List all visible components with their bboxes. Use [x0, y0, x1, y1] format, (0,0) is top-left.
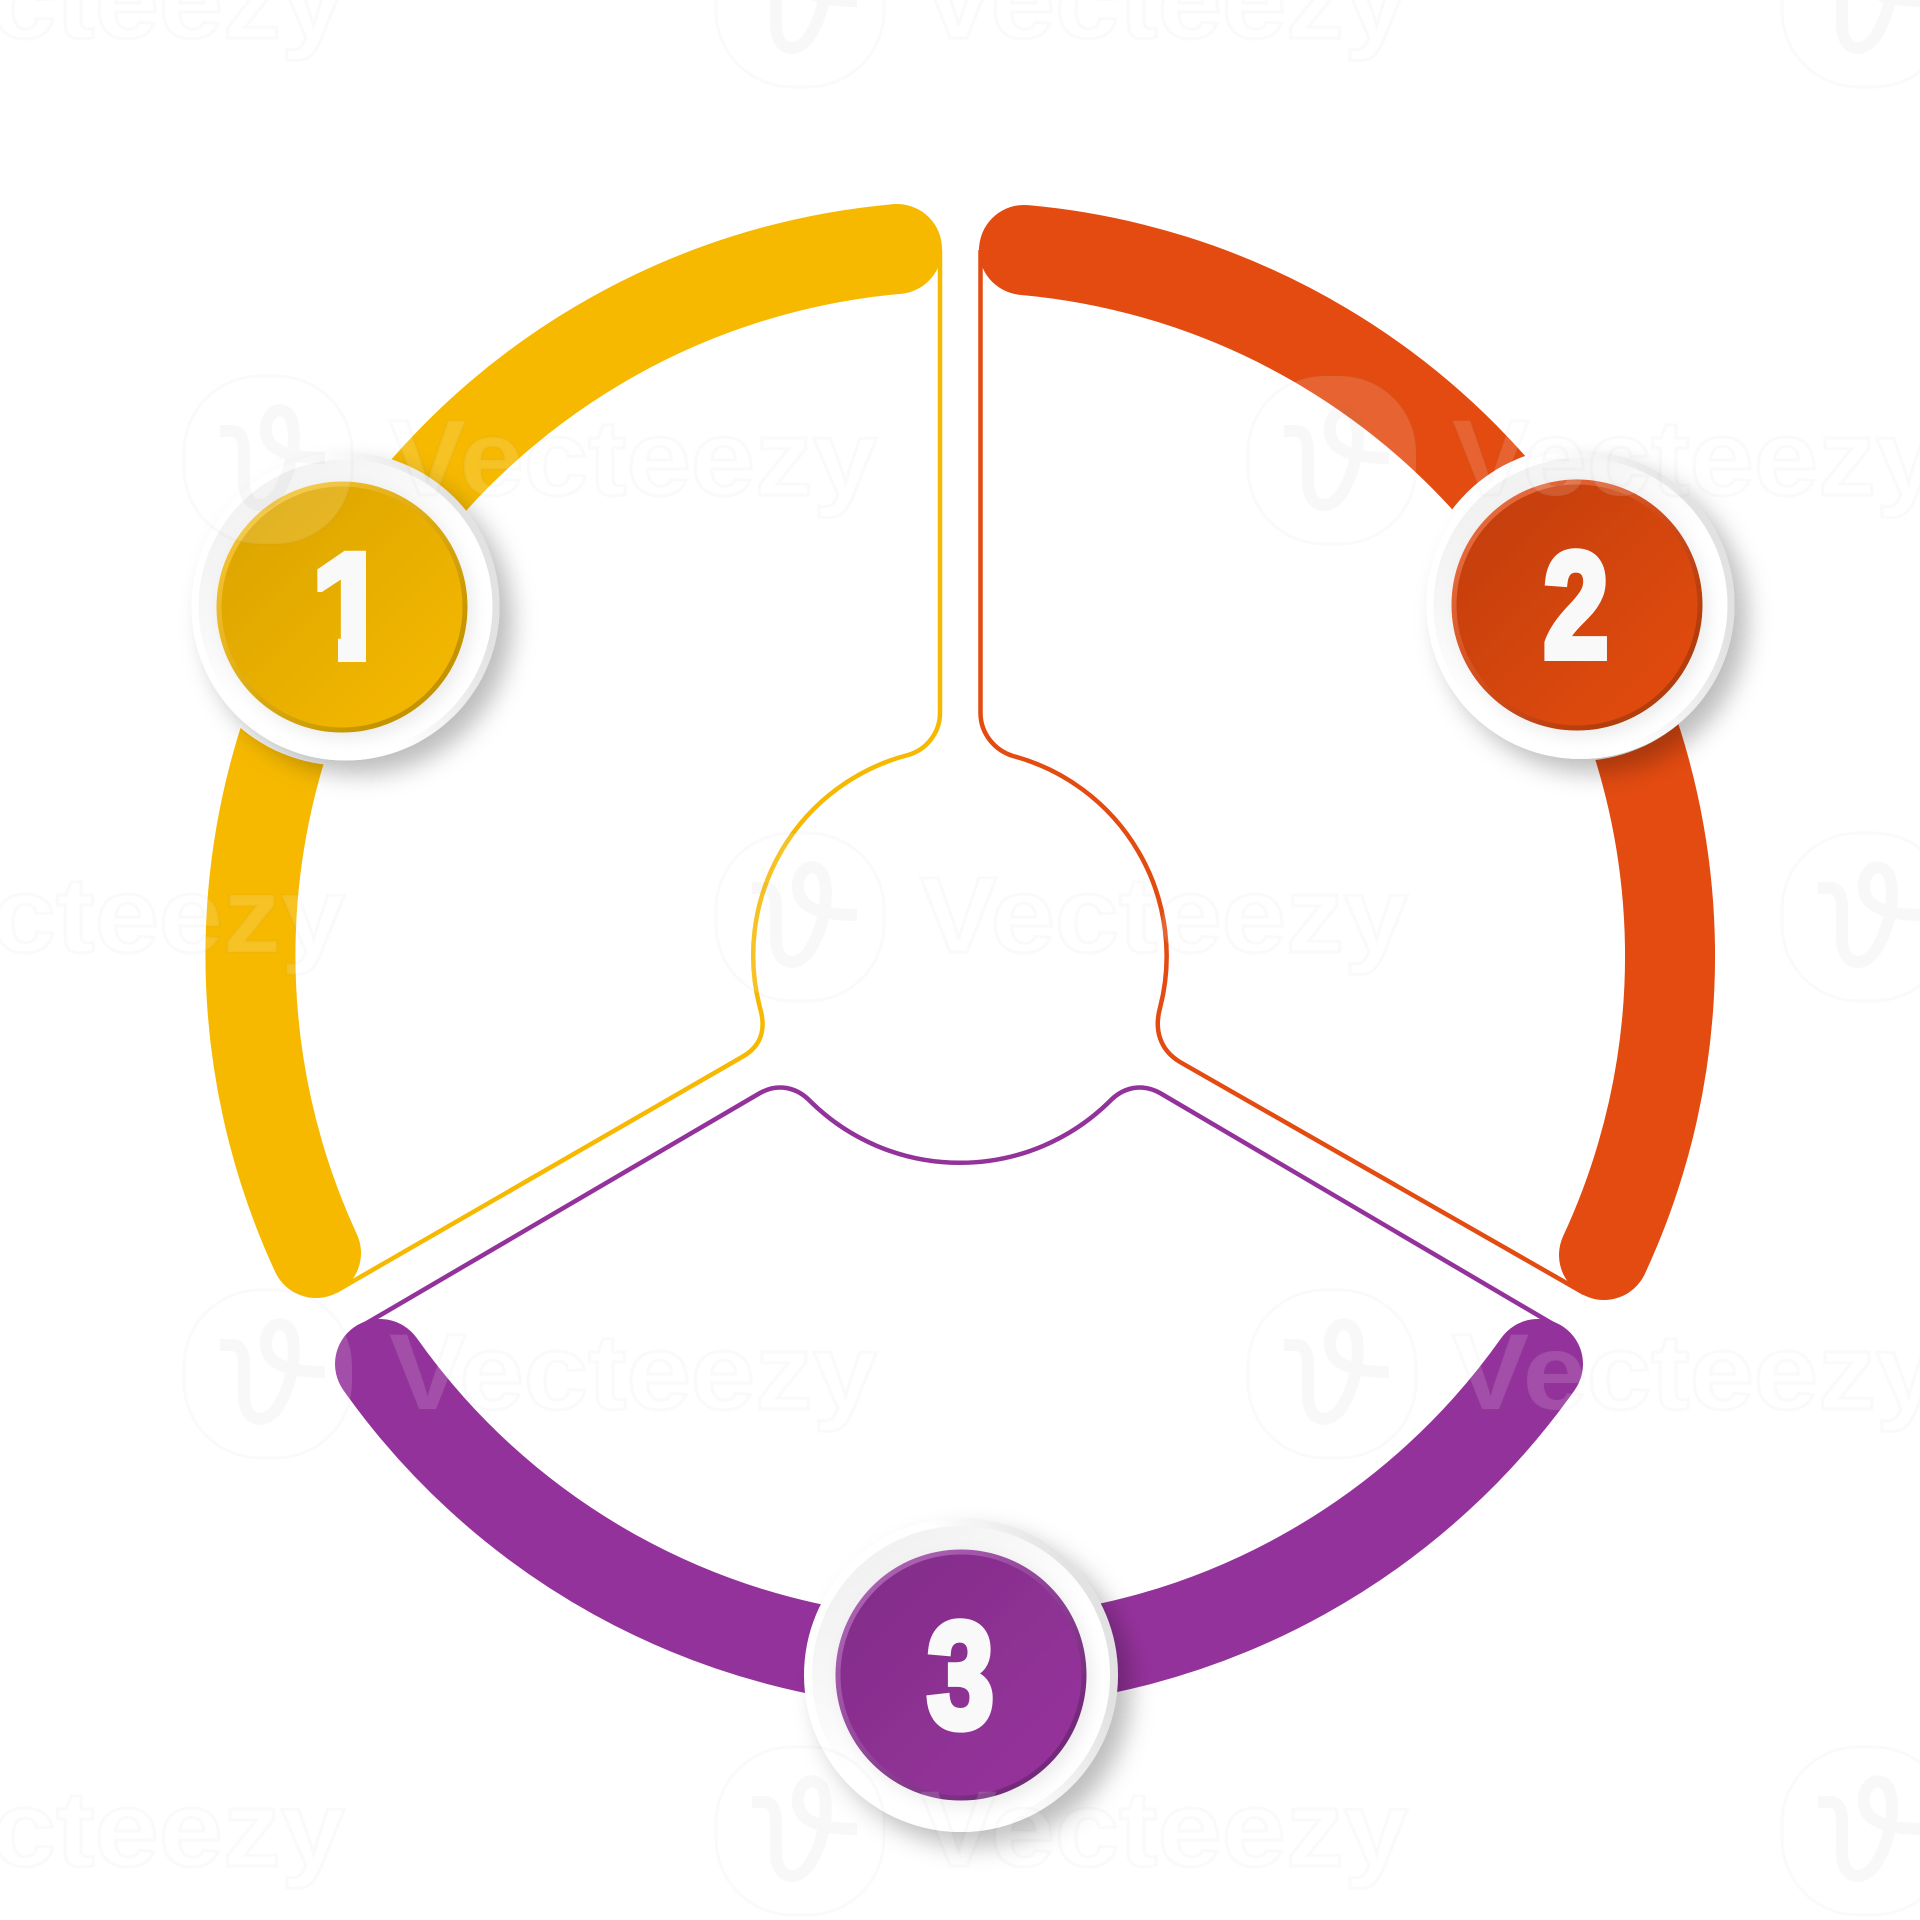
badge: number 2 — [1420, 447, 1734, 761]
purple arc band — [380, 1364, 1538, 1664]
watermark text: Vecteezy — [1452, 397, 1920, 518]
numeral 3: 3 — [927, 1591, 994, 1759]
numeral 2: 2 — [1543, 521, 1609, 689]
badge: number 3 — [804, 1518, 1118, 1832]
yellow arc band — [250, 249, 897, 1253]
purple thin outline — [360, 1087, 1558, 1327]
infographic canvas — [192, 204, 1760, 1864]
panel: step 1 yellow segment — [250, 249, 940, 1291]
orange thin outline — [980, 250, 1584, 1293]
panel: step 3 purple segment — [360, 1087, 1558, 1664]
watermark text: Vecteezy — [389, 397, 877, 518]
badge: number 1 — [186, 452, 500, 766]
watermark text: Vecteezy — [920, 854, 1408, 975]
yellow thin outline — [336, 250, 940, 1291]
watermark text: Vecteezy — [920, 1768, 1408, 1889]
panel: step 2 orange segment — [980, 250, 1670, 1293]
orange arc band — [1024, 250, 1670, 1255]
watermark text: Vecteezy — [389, 1311, 877, 1432]
watermark text: Vecteezy — [1452, 1311, 1920, 1432]
numeral 1: 1 — [311, 524, 391, 691]
